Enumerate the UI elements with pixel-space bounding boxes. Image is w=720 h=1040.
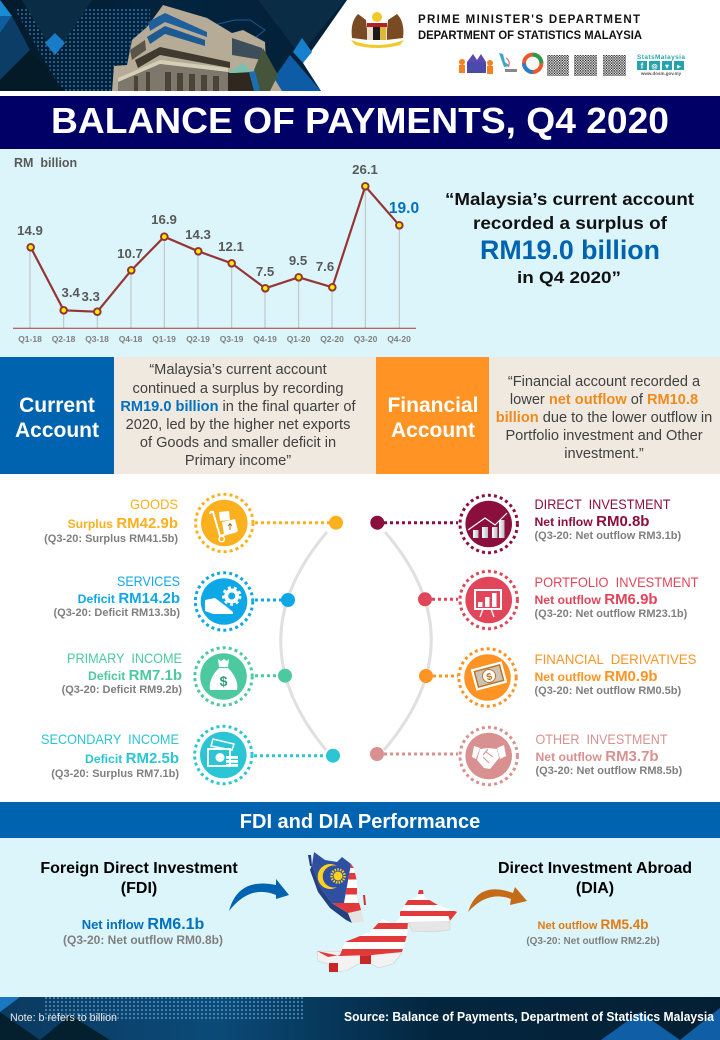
- panel: chart background: [0, 149, 720, 357]
- line chart: current account: Q3-20: [354, 334, 378, 344]
- line chart: current account: Q2-19: [186, 334, 210, 344]
- panel: current account: Current: [19, 394, 95, 417]
- block: direct investment abroad: [498, 860, 692, 947]
- item: goods: GOODS: [130, 496, 178, 512]
- item: secondary income: (Q3-20: Surplus RM7.1b): [51, 768, 179, 780]
- map: Malaysia flag: [308, 852, 460, 972]
- item: portfolio investment: PORTFOLIO INVESTMENT: [534, 574, 699, 590]
- header department text: PRIME MINISTER'S DEPARTMENT: [418, 14, 640, 26]
- icon: presentation board: [475, 590, 501, 617]
- line chart: current account: 16.9: [151, 212, 177, 227]
- line chart: current account: Q1-19: [152, 334, 176, 344]
- callout: quote: RM19.0 billion: [480, 235, 660, 265]
- line chart: current account: 10.7: [117, 246, 143, 261]
- panel: current account: Account: [15, 419, 99, 442]
- item: primary income: PRIMARY INCOME: [67, 650, 182, 666]
- header banner: [0, 0, 347, 91]
- item: other investment: (Q3-20: Net outflow RM8.5b): [536, 765, 683, 777]
- item: financial derivatives: [419, 649, 696, 706]
- icon: coat of arms: [351, 12, 404, 48]
- header logos and QR codes: ◎: [651, 64, 658, 70]
- item: services: SERVICES: [117, 573, 180, 589]
- header department text: DEPARTMENT OF STATISTICS MALAYSIA: [418, 30, 642, 42]
- item: portfolio investment: Net outflow RM6.9b: [534, 591, 658, 608]
- line chart: current account: 7.5: [256, 264, 274, 279]
- header logos and QR codes: ▸: [676, 64, 681, 70]
- callout: quote: “Malaysia’s current account: [445, 189, 694, 209]
- panel: current account: “Malaysia’s current account: [149, 362, 327, 378]
- item: goods: [44, 494, 343, 552]
- timeline arcs: [281, 532, 431, 750]
- footer: [0, 997, 720, 1040]
- block: direct investment abroad: (Q3-20: Net outflow RM2.2b): [526, 936, 660, 947]
- item: services: Deficit RM14.2b: [78, 590, 180, 607]
- item: secondary income: Deficit RM2.5b: [85, 750, 179, 767]
- header logos and QR codes: ▾: [664, 64, 669, 70]
- item: services: [53, 573, 295, 630]
- footer: Source: Balance of Payments, Department of Statistics Malaysia: [344, 1010, 715, 1024]
- title bar: [0, 96, 720, 149]
- line chart: current account: Q4-20: [387, 334, 411, 344]
- panel: current account: 2020, led by the higher net exports: [126, 417, 350, 433]
- item: direct investment: [370, 495, 682, 553]
- item: financial derivatives: (Q3-20: Net outflow RM0.5b): [534, 685, 682, 697]
- icon: growth chart: [468, 513, 507, 538]
- panel: FDI and DIA background: [0, 838, 720, 997]
- item: portfolio investment: (Q3-20: Net outflow RM23.1b): [534, 608, 688, 620]
- section heading: FDI and DIA: [0, 802, 720, 838]
- panel: financial account: Portfolio investment and Other: [505, 428, 703, 444]
- line chart: current account: Q4-19: [253, 334, 277, 344]
- line chart: current account: 19.0: [389, 200, 419, 217]
- line chart: current account: 3.3: [82, 289, 100, 304]
- line chart: current account: 14.3: [185, 227, 211, 242]
- item: goods: (Q3-20: Surplus RM41.5b): [44, 533, 178, 545]
- arrow: into Malaysia: [229, 879, 289, 911]
- line chart: current account: 7.6: [316, 259, 334, 274]
- header logos and QR codes: f: [641, 62, 644, 70]
- callout: quote: recorded a surplus of: [473, 213, 667, 233]
- item: other investment: Net outflow RM3.7b: [536, 748, 659, 765]
- item: primary income: [62, 648, 292, 705]
- panel: financial account: Financial: [387, 394, 479, 417]
- panel: financial account: [376, 357, 720, 474]
- block: foreign direct investment: Foreign Direct Investment: [40, 860, 238, 877]
- panel: financial account: Account: [391, 419, 475, 442]
- line chart: current account: Q1-20: [287, 334, 311, 344]
- header logos and QR codes: StatsMalaysia: [637, 54, 685, 61]
- panel: current account: of Goods and smaller deficit in: [140, 435, 336, 451]
- panel: current account: RM19.0 billion in the final quarter of: [120, 399, 357, 415]
- panel: current account: [0, 357, 376, 474]
- line chart: current account: 3.4: [62, 285, 81, 300]
- block: direct investment abroad: (DIA): [576, 880, 614, 897]
- block: foreign direct investment: (FDI): [121, 880, 157, 897]
- item: financial derivatives: Net outflow RM0.9b: [534, 668, 658, 685]
- panel: financial account: lower net outflow of RM10.8: [510, 392, 698, 408]
- footer: Note: b refers to billion: [10, 1012, 117, 1024]
- icon: money bag: [210, 659, 237, 690]
- block: foreign direct investment: Net inflow RM6.1b: [82, 916, 205, 933]
- item: primary income: Deficit RM7.1b: [88, 667, 182, 684]
- line chart: current account: 26.1: [352, 162, 378, 177]
- line chart: current account: Q1-18: [18, 334, 42, 344]
- item: portfolio investment: [418, 571, 699, 629]
- block: direct investment abroad: Direct Investment Abroad: [498, 860, 692, 877]
- line chart: current account: Q4-18: [119, 334, 143, 344]
- line chart: current account: Q3-18: [85, 334, 109, 344]
- item: other investment: OTHER INVESTMENT: [536, 731, 668, 747]
- item: direct investment: (Q3-20: Net outflow RM3.1b): [534, 530, 682, 542]
- panel: financial account: “Financial account recorded a: [508, 374, 701, 390]
- item: secondary income: SECONDARY INCOME: [41, 731, 179, 747]
- panel: financial account: investment.”: [564, 446, 644, 462]
- header logos and QR codes: www.dosm.gov.my: [640, 71, 682, 76]
- panel: current account: Primary income”: [185, 453, 291, 469]
- line chart: current account: Q2-18: [52, 334, 76, 344]
- icon: hand with gear: [205, 588, 240, 614]
- icon: banknote: $: [485, 671, 494, 683]
- icon: office building: [112, 5, 282, 91]
- arrow: out of Malaysia: [468, 887, 527, 912]
- title: BALANCE OF PAYMENTS, Q4 2020: [51, 100, 669, 141]
- line chart: current account: 12.1: [218, 239, 244, 254]
- item: services: (Q3-20: Deficit RM13.3b): [53, 607, 180, 619]
- line chart: current account: [13, 156, 419, 344]
- item: direct investment: DIRECT INVESTMENT: [534, 496, 671, 512]
- item: primary income: (Q3-20: Deficit RM9.2b): [62, 684, 182, 696]
- item: financial derivatives: FINANCIAL DERIVATIVES: [534, 651, 696, 667]
- line chart: current account: Q3-19: [220, 334, 244, 344]
- callout: quote: [445, 189, 694, 287]
- block: direct investment abroad: Net outflow RM5.4b: [538, 917, 648, 932]
- icon: banknote: [471, 661, 507, 691]
- item: goods: Surplus RM42.9b: [68, 515, 178, 532]
- icon: banknotes: [208, 739, 238, 767]
- icon: money bag: $: [220, 673, 228, 689]
- line chart: current account: 9.5: [289, 253, 307, 268]
- block: foreign direct investment: [40, 860, 238, 947]
- item: direct investment: Net inflow RM0.8b: [534, 513, 649, 530]
- header department text: [418, 14, 642, 42]
- header logos and QR codes: [459, 53, 685, 76]
- callout: quote: in Q4 2020”: [517, 268, 621, 287]
- item: other investment: [370, 727, 683, 785]
- line chart: current account: RM billion: [14, 156, 77, 170]
- panel: current account: continued a surplus by recording: [133, 381, 343, 397]
- block: foreign direct investment: (Q3-20: Net outflow RM0.8b): [63, 933, 223, 947]
- line chart: current account: 14.9: [17, 223, 43, 238]
- icon: handshake: [472, 745, 506, 769]
- line chart: current account: Q2-20: [320, 334, 344, 344]
- icon: hand truck: [210, 511, 238, 542]
- panel: financial account: billion due to the lower outflow in: [496, 410, 712, 426]
- section heading: FDI and DIA: FDI and DIA Performance: [240, 811, 480, 833]
- item: secondary income: [41, 726, 340, 784]
